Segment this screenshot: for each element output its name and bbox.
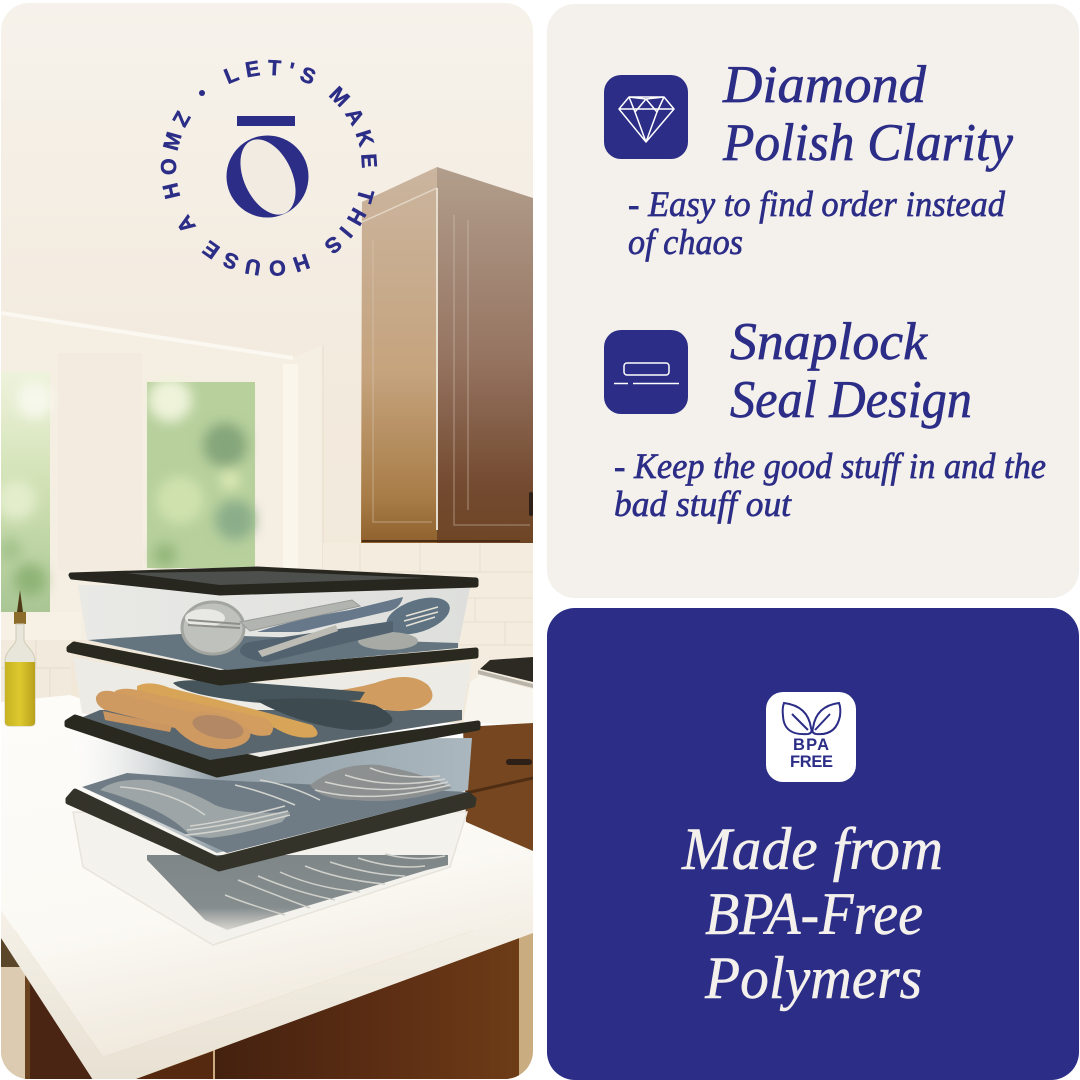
text: easy to find order: of chaos (628, 222, 743, 262)
logo macron (237, 116, 295, 126)
heading: snaplock seal design (730, 313, 972, 429)
back counter (463, 675, 533, 726)
wall cabinet (361, 167, 533, 543)
text: easy to find order (628, 184, 1006, 262)
icon: bpa free badge (766, 692, 856, 782)
circular slogan: LET'S MAKE THIS HOUSE A HOMZ (160, 60, 378, 276)
text: easy to find order: - Easy to find order instead (628, 184, 1006, 224)
heading: snaplock seal design: Snaplock (730, 313, 928, 371)
container 4 (68, 791, 474, 945)
oil bottle (5, 590, 35, 726)
countertop (1, 695, 533, 1080)
heading: diamond polish clarity: Polish Clarity (722, 114, 1013, 172)
stove (478, 657, 533, 688)
container 1 (71, 569, 476, 670)
icon: bpa free badge: FREE (790, 753, 833, 771)
text: keep the good stuff: - Keep the good stuff in and the (614, 446, 1046, 486)
container 3 (67, 717, 478, 853)
heading: made from bpa-free polymers: BPA-Free (705, 881, 923, 947)
lower drawers (463, 723, 533, 853)
panel: features (547, 4, 1079, 598)
panel: bpa free (547, 608, 1079, 1080)
icon: snaplock seal (604, 330, 688, 414)
floor and base cabinet (1, 930, 533, 1080)
heading: made from bpa-free polymers (681, 816, 943, 1011)
window (0, 313, 323, 640)
text: keep the good stuff: bad stuff out (614, 484, 792, 524)
panel: kitchen photo (1, 3, 533, 1079)
icon: bpa free badge: BPA (793, 736, 829, 754)
container 2 (69, 644, 476, 760)
heading: diamond polish clarity: Diamond (722, 56, 927, 114)
heading: made from bpa-free polymers: Polymers (704, 945, 922, 1011)
text: keep the good stuff (614, 446, 1046, 524)
logo dot (199, 90, 205, 96)
brand logo badge (160, 60, 378, 276)
stacked storage containers (67, 569, 478, 945)
logo ring (226, 136, 308, 218)
icon: diamond (604, 75, 688, 159)
heading: diamond polish clarity (722, 56, 1013, 172)
heading: snaplock seal design: Seal Design (730, 371, 972, 429)
heading: made from bpa-free polymers: Made from (681, 816, 943, 882)
backsplash tiles (1, 543, 533, 702)
